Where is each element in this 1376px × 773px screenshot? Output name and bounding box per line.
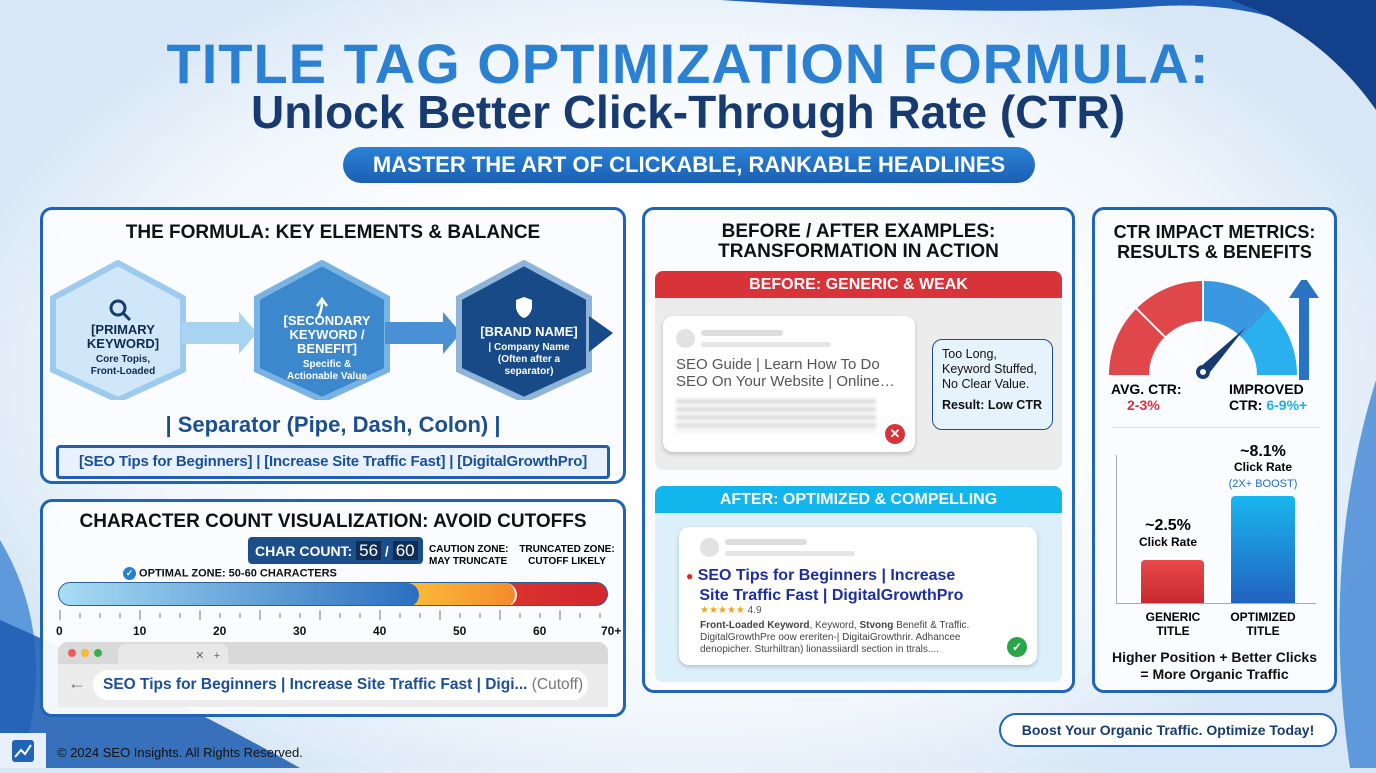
scale: 70+ — [601, 624, 621, 638]
gauge labels — [1111, 381, 1182, 413]
after card: ● SEO Tips for Beginners | Increase — [686, 567, 955, 584]
heading: THE FORMULA: KEY ELEMENTS & BALANCE — [126, 222, 540, 243]
before card: SEO Guide | Learn How To Do — [676, 356, 880, 373]
after card: denopicher. Sturhiltran) lionassiiardl section in ttrals.... — [700, 644, 939, 655]
hex text: primary: [PRIMARY — [91, 322, 155, 337]
heading: TRANSFORMATION IN ACTION — [718, 241, 999, 262]
callout: Result: Low CTR — [942, 398, 1042, 412]
hex text: brand — [480, 324, 578, 377]
char count box: CHAR COUNT: 56 / 60 — [255, 541, 415, 560]
progress bar — [58, 582, 608, 606]
footer logo icon — [0, 733, 46, 768]
scale — [56, 610, 621, 638]
heading: CTR IMPACT METRICS: — [1114, 222, 1315, 242]
hex text: brand: [BRAND NAME] — [480, 324, 578, 339]
gauge — [1109, 280, 1319, 380]
hex text: primary: KEYWORD] — [87, 336, 159, 351]
panel: CTR metrics: CTR: 6-9%+ — [1229, 397, 1307, 413]
bar chart: Click Rate — [1139, 535, 1197, 549]
panel: CTR metrics — [1092, 207, 1337, 693]
scale: 10 — [133, 624, 147, 638]
example title: [SEO Tips for Beginners] | [Increase Site Traffic Fast] | [DigitalGrowthPro] — [79, 453, 587, 470]
callout — [932, 339, 1053, 430]
scale: 30 — [293, 624, 307, 638]
banner: MASTER THE ART OF CLICKABLE, RANKABLE HEADLINES — [373, 152, 1005, 177]
hex text: secondary — [284, 313, 370, 382]
hex text: brand: separator) — [505, 366, 553, 377]
heading — [718, 221, 999, 262]
CTA button: Boost Your Organic Traffic. Optimize Today! — [1022, 722, 1314, 738]
panel: CTR metrics: IMPROVED — [1229, 381, 1304, 397]
truncated label — [519, 544, 615, 567]
browser mockup: ← — [68, 673, 86, 693]
before card: SEO On Your Website | Online… — [676, 373, 895, 390]
hex text: secondary: KEYWORD / — [289, 327, 365, 342]
bar chart: TITLE — [1246, 624, 1280, 638]
browser mockup: SEO Tips for Beginners | Increase Site Traffic Fast | Digi... (Cutoff) — [103, 676, 583, 693]
panel: formula — [40, 207, 626, 484]
hex text: secondary: Specific & — [303, 359, 351, 370]
hexagon diagram — [50, 260, 613, 400]
scale: 60 — [533, 624, 547, 638]
after card: DigitalGrowthPre oow ereriten-| DigitaiGrowthrir. Adhancee — [700, 632, 960, 643]
browser mockup: ✕ + — [195, 650, 220, 662]
heading — [1114, 222, 1315, 262]
bar chart: (2X+ BOOST) — [1229, 478, 1297, 490]
banner — [343, 147, 1035, 183]
title: TITLE TAG OPTIMIZATION FORMULA: — [166, 32, 1210, 95]
scale: 0 — [56, 624, 63, 638]
after card: Site Traffic Fast | DigitalGrowthPro — [699, 587, 963, 604]
before header: BEFORE: GENERIC & WEAK — [749, 276, 968, 293]
hex text: secondary: BENEFIT] — [297, 341, 357, 356]
hex text: brand: (Often after a — [498, 354, 560, 365]
scale: 20 — [213, 624, 227, 638]
after card — [679, 527, 1037, 665]
bar chart: ~8.1% — [1240, 443, 1286, 460]
panel: character count — [40, 499, 626, 717]
after card: ★★★★★ 4.9 — [700, 605, 762, 616]
before card: ✕ — [890, 426, 900, 441]
after section — [655, 486, 1062, 682]
after header — [655, 486, 1062, 513]
before header — [655, 271, 1062, 298]
after card: Front-Loaded Keyword, Keyword, Stvong Benefit & Traffic. — [700, 620, 969, 631]
browser mockup — [58, 642, 608, 707]
hex text: primary — [87, 322, 159, 377]
separator text: | Separator (Pipe, Dash, Colon) | — [165, 412, 501, 437]
hex text: primary: Front-Loaded — [91, 366, 155, 377]
bar chart: Click Rate — [1234, 460, 1292, 474]
after header: AFTER: OPTIMIZED & COMPELLING — [720, 491, 997, 508]
heading: RESULTS & BENEFITS — [1117, 242, 1312, 262]
hex text: secondary: [SECONDARY — [284, 313, 370, 328]
caution label: MAY TRUNCATE — [429, 556, 507, 567]
caution label — [429, 544, 508, 567]
hex text: brand: | Company Name — [488, 342, 570, 353]
before card — [663, 316, 915, 452]
bar chart: ~2.5% — [1145, 517, 1191, 534]
callout: Too Long, — [942, 347, 997, 361]
heading: BEFORE / AFTER EXAMPLES: — [722, 221, 995, 242]
hex text: primary: Core Topis, — [96, 354, 150, 365]
callout: Keyword Stuffed, — [942, 362, 1037, 376]
bottom statement: Higher Position + Better Clicks — [1112, 649, 1317, 665]
gauge labels: 2-3% — [1127, 397, 1160, 413]
subtitle: Unlock Better Click-Through Rate (CTR) — [251, 86, 1125, 138]
heading: CHARACTER COUNT VISUALIZATION: AVOID CUTOFFS — [80, 511, 586, 532]
bottom statement — [1112, 649, 1317, 682]
CTA button — [999, 713, 1337, 747]
bar chart: TITLE — [1156, 624, 1190, 638]
callout: No Clear Value. — [942, 377, 1029, 391]
caution label: CAUTION ZONE: — [429, 544, 508, 555]
optimal zone label: ✓ — [126, 568, 133, 578]
scale: 40 — [373, 624, 387, 638]
char count box — [248, 537, 423, 564]
gauge labels: AVG. CTR: — [1111, 381, 1182, 397]
example title — [56, 445, 610, 479]
before section — [655, 271, 1062, 470]
after card: ✓ — [1012, 640, 1022, 654]
bar chart: GENERIC — [1146, 610, 1200, 624]
optimal zone label: OPTIMAL ZONE: 50-60 CHARACTERS — [139, 567, 337, 579]
bottom statement: = More Organic Traffic — [1140, 666, 1289, 682]
bar chart: OPTIMIZED — [1230, 610, 1296, 624]
hex text: secondary: Actionable Value — [287, 371, 367, 382]
bar chart — [1116, 443, 1316, 638]
panel: before/after — [642, 207, 1075, 693]
footer text: © 2024 SEO Insights. All Rights Reserved. — [57, 745, 303, 760]
scale: 50 — [453, 624, 467, 638]
truncated label: CUTOFF LIKELY — [528, 556, 606, 567]
truncated label: TRUNCATED ZONE: — [519, 544, 615, 555]
